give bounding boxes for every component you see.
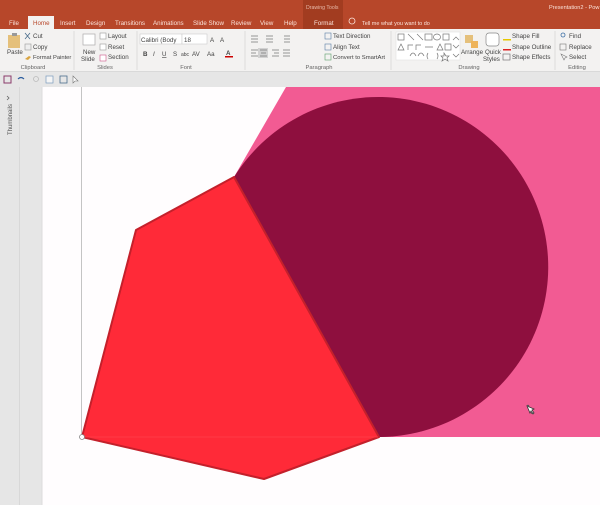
group: clipboard: Cut (33, 33, 43, 40)
group: slides: Slides (97, 65, 113, 71)
group: editing: Select (569, 54, 586, 61)
title bar: Presentation2 - Pow (549, 5, 600, 11)
group: font: B (143, 51, 148, 58)
vertex handle (80, 434, 84, 440)
group: slides: New (83, 49, 96, 56)
group: font: Aa (207, 51, 215, 58)
ribbon tabs: Review (231, 20, 252, 27)
ribbon tabs: Help (284, 20, 297, 27)
group: drawing: Quick (485, 49, 502, 56)
ribbon tabs: Transitions (115, 20, 145, 27)
group: drawing: Shape Fill (512, 33, 540, 40)
group: drawing: Arrange (461, 49, 484, 56)
title bar (0, 0, 600, 29)
group: slides: Section (108, 54, 129, 61)
group: drawing: Drawing (458, 65, 480, 71)
ribbon tabs: File (9, 20, 20, 27)
ribbon dividers (74, 31, 555, 70)
vertical guide line (81, 87, 82, 437)
group: clipboard: Clipboard (21, 65, 45, 71)
group: drawing: Shape Outline (512, 44, 552, 51)
group: drawing (396, 32, 552, 71)
inner edge highlight (83, 436, 378, 438)
thumbnails pane (0, 87, 42, 505)
group: paragraph: Convert to SmartArt (333, 55, 385, 61)
ribbon tabs: Format (314, 20, 334, 27)
group: editing: Find (569, 33, 582, 40)
group: font: A (210, 37, 215, 44)
group: editing (560, 33, 592, 71)
group: paragraph (251, 33, 385, 71)
ribbon body (0, 29, 600, 72)
group: font: 18 (184, 37, 191, 44)
group: slides: Reset (108, 44, 124, 51)
group: font: AV (192, 51, 201, 58)
ribbon tabs (9, 16, 430, 30)
cursor icon (527, 405, 534, 414)
group: paragraph: Align Text (333, 44, 360, 51)
group: slides (81, 33, 129, 71)
group: clipboard (7, 33, 71, 71)
group: paragraph: Text Direction (333, 33, 371, 40)
group: slides: Slide (81, 56, 95, 63)
group: font: abc (181, 52, 190, 58)
group: paragraph: Paragraph (305, 65, 333, 71)
group: font: A (226, 50, 231, 57)
group: font (140, 34, 233, 71)
group: slides: Layout (108, 33, 127, 40)
group: font: A (220, 37, 225, 44)
group: font: Font (180, 65, 192, 71)
ribbon tabs: Animations (153, 20, 184, 27)
group: clipboard: Paste (7, 49, 23, 56)
ribbon tabs: Home (33, 20, 50, 27)
ribbon tabs: View (260, 20, 274, 27)
ribbon tabs: Tell me what you want to do (362, 21, 430, 27)
group: clipboard: Format Painter (33, 55, 71, 61)
group: font: Calibri (Body (141, 37, 177, 44)
quick access toolbar (0, 72, 600, 87)
group: editing: Editing (568, 65, 586, 71)
group: font: U (162, 51, 166, 58)
group: font: I (153, 51, 155, 58)
thumbnails pane: Thumbnails (8, 104, 14, 135)
title bar: Drawing Tools (306, 5, 339, 11)
red polygon (82, 177, 379, 479)
dark maroon circle segment (234, 97, 548, 437)
group: drawing: Shape Effects (512, 54, 550, 61)
slide canvas (42, 87, 600, 505)
group: font: S (173, 51, 177, 58)
ribbon tabs: Insert (60, 20, 76, 27)
ribbon tabs: Slide Show (193, 20, 224, 27)
group: editing: Replace (569, 44, 592, 51)
group: drawing: Styles (483, 56, 500, 63)
pink shape (234, 87, 600, 437)
group: clipboard: Copy (33, 44, 48, 51)
ribbon tabs: Design (86, 20, 106, 27)
